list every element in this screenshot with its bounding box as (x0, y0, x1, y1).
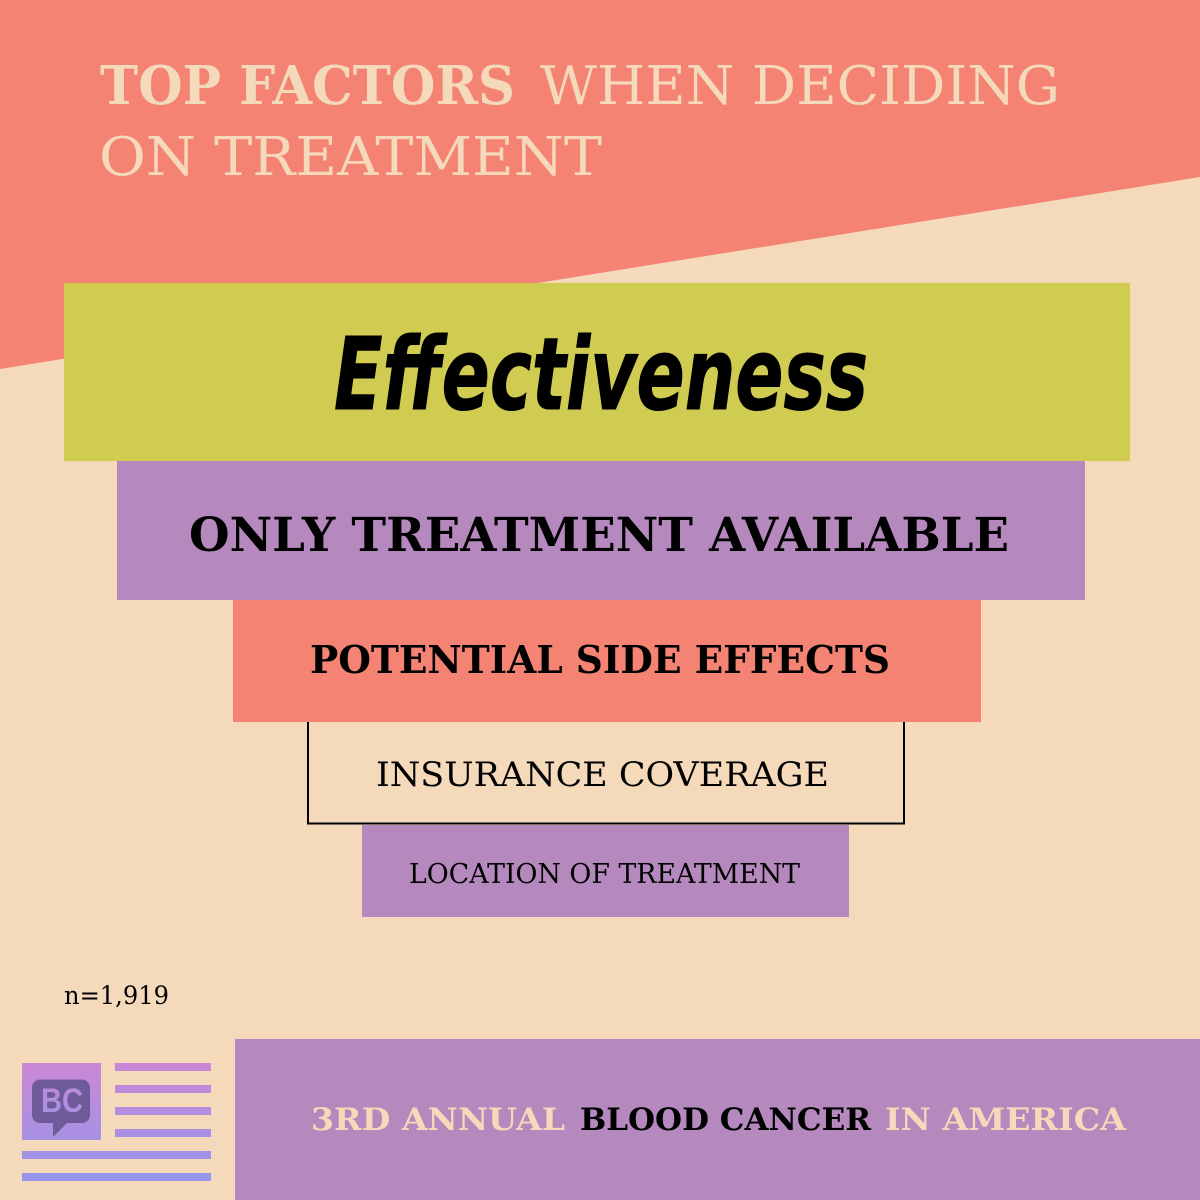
footer text (311, 1102, 1127, 1138)
label: potential side effects: POTENTIAL SIDE EFFECTS (310, 637, 890, 682)
panel: only treatment available (117, 461, 1085, 600)
icon: speech bubble (32, 1080, 90, 1137)
logo letters: BC (41, 1082, 83, 1120)
label: only treatment available: ONLY TREATMENT AVAILABLE (189, 508, 1009, 563)
coral header background (0, 0, 1200, 369)
panel: effectiveness (64, 283, 1130, 461)
sample size note: n=1,919 (64, 981, 169, 1010)
title: TOP FACTORS (100, 55, 515, 117)
title: ON TREATMENT (99, 127, 602, 188)
label: location of treatment: LOCATION OF TREATMENT (409, 859, 800, 890)
label: insurance coverage: INSURANCE COVERAGE (376, 755, 829, 795)
footer text: 3RD ANNUAL (311, 1102, 565, 1138)
panel: potential side effects (233, 600, 981, 722)
panel: insurance coverage (308, 722, 904, 824)
title: WHEN DECIDING (540, 56, 1060, 117)
footer text: BLOOD CANCER (580, 1102, 871, 1138)
panel: footer (235, 1039, 1200, 1200)
label: effectiveness: Effectiveness (334, 316, 868, 433)
footer text: IN AMERICA (885, 1102, 1127, 1138)
title (99, 55, 1060, 188)
icon: BC logo with report lines (22, 1063, 211, 1181)
panel: location of treatment (362, 825, 849, 917)
